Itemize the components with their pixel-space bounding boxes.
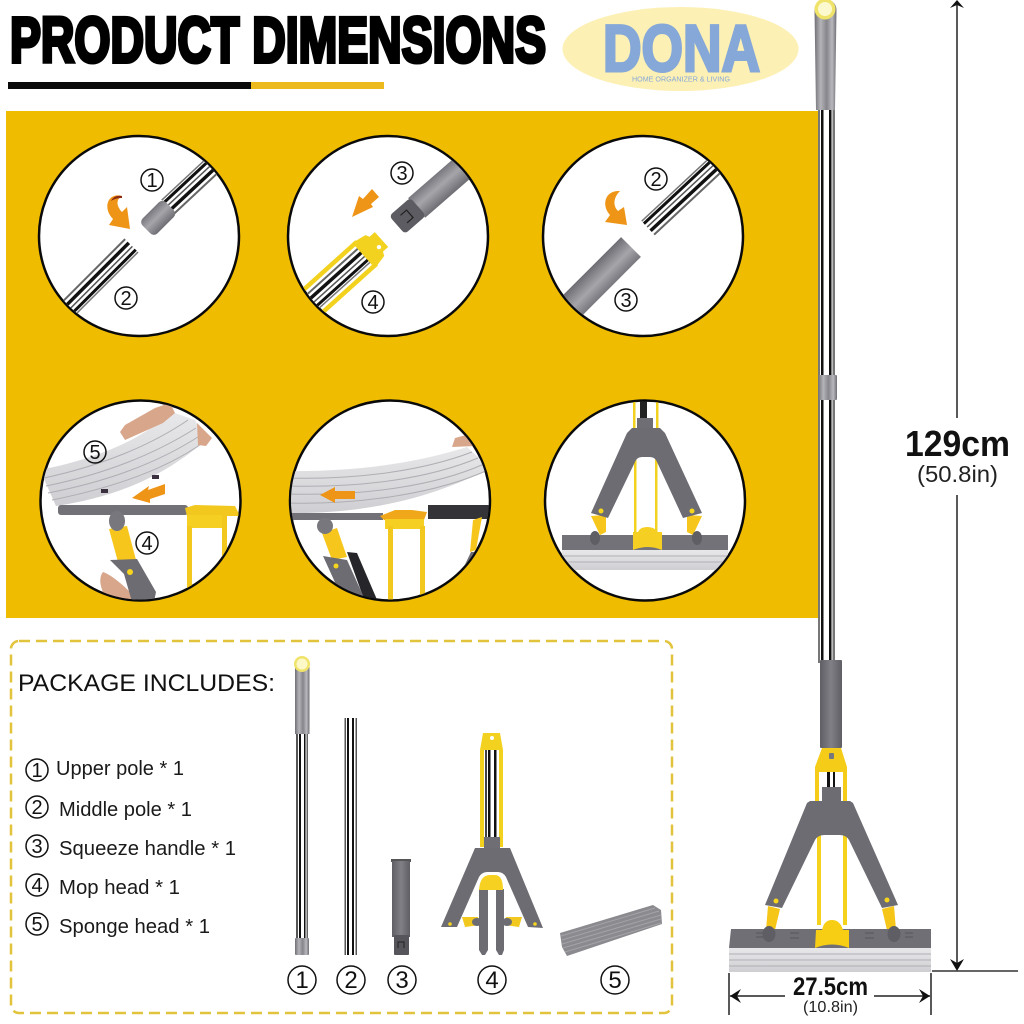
yellow connector [815, 748, 847, 803]
part 1: upper pole [294, 656, 310, 955]
parts list: Sponge head * 1 [59, 916, 210, 938]
parts list: Upper pole * 1 [56, 758, 184, 780]
Y frame [765, 801, 898, 908]
width dimension: 27.5cm [729, 973, 931, 1016]
part number labels: 5 [608, 967, 622, 994]
logo: DONA: DONA [603, 11, 760, 85]
part number labels: 2 [344, 967, 358, 994]
step 4: fit sponge 5 onto mop head [40, 400, 240, 602]
yellow rods [817, 835, 847, 925]
mop head plate [729, 929, 931, 948]
step 1: join poles 1 and 2: 1 [146, 170, 158, 192]
panel: assembly steps [6, 97, 820, 618]
parts list: 2 [31, 797, 43, 819]
sponge [729, 948, 931, 972]
pole collar [818, 375, 837, 400]
height dimension: 129cm: 129cm [905, 423, 1010, 464]
step 1: join poles 1 and 2 [38, 134, 240, 338]
part 5: sponge head [560, 905, 662, 956]
parts list: Squeeze handle * 1 [59, 838, 236, 860]
part number labels: 4 [485, 967, 499, 994]
part 4: mop head [441, 733, 543, 955]
parts list [26, 758, 236, 938]
part number labels [288, 966, 629, 994]
part 2: middle pole [344, 718, 357, 955]
width dimension: 27.5cm: (10.8in) [803, 999, 858, 1016]
step 4: fit sponge 5 onto mop head: 4 [141, 533, 153, 555]
panel: package includes [11, 641, 672, 1013]
width dimension: 27.5cm: 27.5cm [793, 973, 868, 1001]
parts list: Mop head * 1 [59, 877, 180, 899]
step 2: attach handle 3 to mop head 4 [286, 134, 490, 338]
title underline [8, 82, 384, 89]
yellow centre clip [815, 920, 849, 948]
upper handle grip [814, 0, 836, 110]
height dimension: 129cm: (50.8in) [917, 461, 998, 487]
parts list: Middle pole * 1 [59, 799, 192, 821]
main metal pole [818, 108, 836, 663]
part number labels: 1 [295, 967, 309, 994]
heading: package includes: PACKAGE INCLUDES: [18, 670, 275, 697]
step 3: slide handle 3 onto pole 2: 2 [650, 169, 662, 191]
step 2: attach handle 3 to mop head 4: 3 [396, 163, 408, 185]
step 3: slide handle 3 onto pole 2: 3 [620, 290, 632, 312]
assembled mop [729, 0, 931, 972]
logo: DONA: HOME ORGANIZER & LIVING [632, 74, 730, 84]
parts list: 1 [31, 760, 43, 782]
step 4: fit sponge 5 onto mop head: 5 [89, 442, 101, 464]
part number labels: 3 [395, 967, 409, 994]
parts list: 4 [31, 875, 43, 897]
step 3: slide handle 3 onto pole 2 [542, 134, 744, 338]
part 3: squeeze handle [391, 859, 411, 955]
title: PRODUCT DIMENSIONS [10, 4, 546, 76]
squeeze handle sleeve [820, 660, 842, 748]
height dimension: 129cm [905, 0, 1018, 971]
step 1: join poles 1 and 2: 2 [120, 288, 132, 310]
step 2: attach handle 3 to mop head 4: 4 [367, 292, 379, 314]
pivot knobs [762, 926, 900, 942]
step 6: assembled mop head [545, 400, 745, 600]
yellow lower arms [766, 906, 896, 930]
parts list: 5 [31, 914, 43, 936]
step 5: press sponge into place [285, 400, 490, 602]
parts list: 3 [31, 836, 43, 858]
